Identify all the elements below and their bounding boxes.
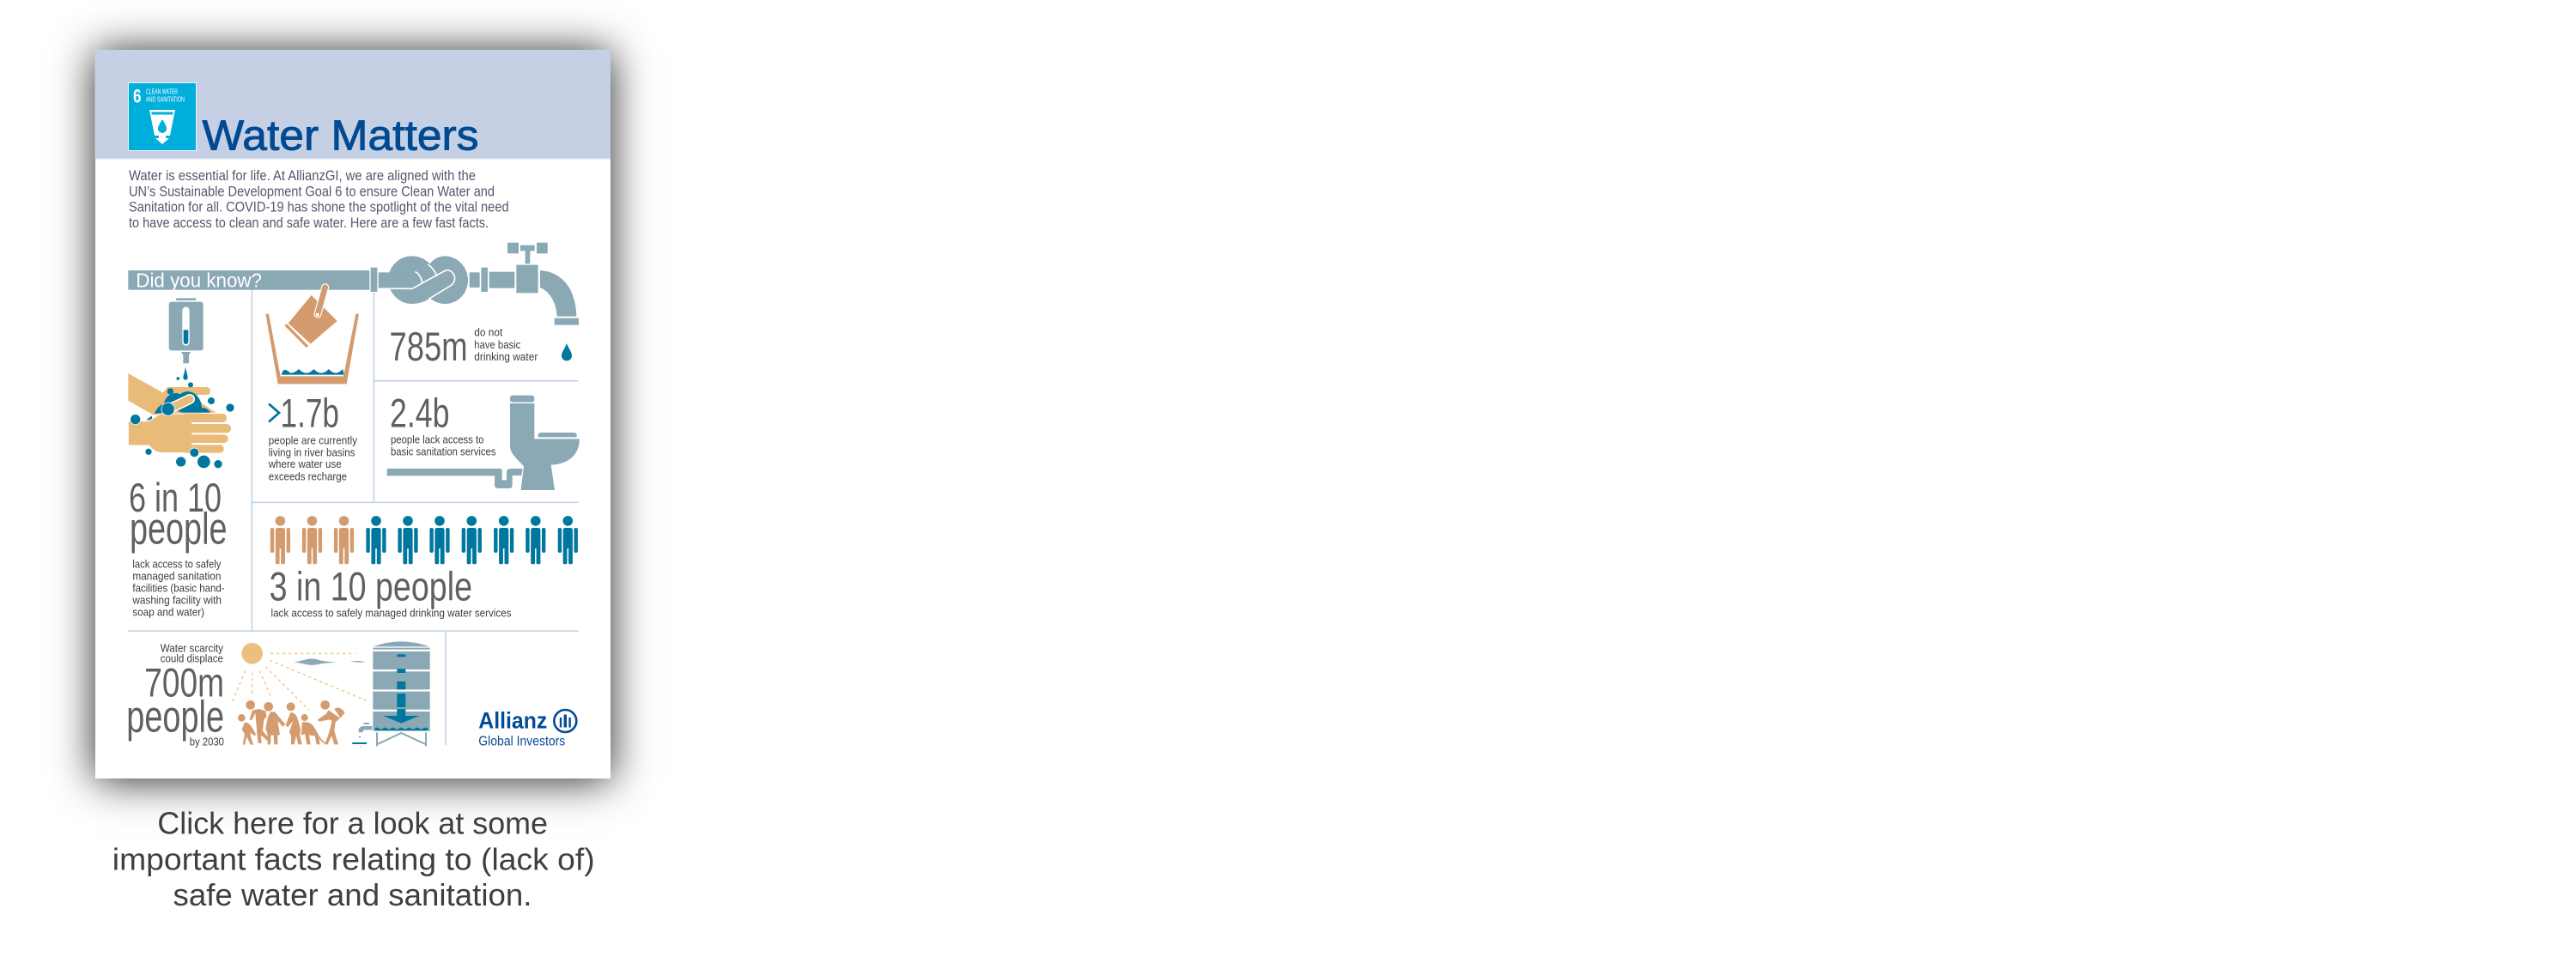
icon: bucket pouring into basin (265, 288, 359, 384)
stat: more than 1.7b: people are currently (269, 433, 358, 446)
icon: toilet and drain pipe (387, 396, 580, 490)
stat: 6 in 10 people: 6 in 10 (129, 475, 222, 520)
icon: water tank (373, 641, 430, 746)
stat: 3 in 10 people: lack access to safely managed drinking water services (271, 606, 512, 619)
icon: soap dispenser (169, 298, 204, 363)
caption: important facts relating to (lack of) (112, 841, 595, 876)
stat: 700m people: 700m (144, 660, 224, 706)
logo: Allianz Global Investors: Allianz (478, 707, 547, 733)
stat: 3 in 10 people: 3 in 10 people (270, 563, 472, 609)
intro paragraph: Water is essential for life. At AllianzGI, we are aligned with the (129, 168, 476, 184)
icon: washing hands (125, 366, 234, 468)
icon: SDG 6 badge: AND SANITATION (146, 96, 185, 104)
caption (112, 806, 595, 912)
stat: 700m people: people (126, 693, 224, 742)
stat: 2.4b (390, 390, 496, 458)
stat: 6 in 10 people: soap and water) (132, 606, 204, 619)
stat: 700m people: by 2030 (190, 736, 224, 748)
caption: safe water and sanitation. (173, 877, 532, 912)
intro paragraph: to have access to clean and safe water. Here are a few fast facts. (129, 215, 489, 231)
stat: more than 1.7b (268, 390, 358, 482)
icon: SDG 6 badge: 6 (133, 86, 141, 106)
intro paragraph (129, 168, 509, 231)
stat: 6 in 10 people (129, 475, 227, 619)
intro paragraph: Sanitation for all. COVID-19 has shone the spotlight of the vital need (129, 200, 509, 215)
icon: SDG 6 badge: CLEAN WATER (146, 88, 178, 95)
icon: displaced people (238, 700, 345, 745)
intro paragraph: UN’s Sustainable Development Goal 6 to ensure Clean Water and (129, 184, 495, 199)
stat: 785m: drinking water (474, 350, 538, 363)
stat: 785m: do not (474, 326, 503, 339)
stat: 2.4b: 2.4b (390, 390, 450, 435)
infographic card background with shadow (94, 50, 611, 778)
stat: 2.4b: basic sanitation services (391, 445, 496, 458)
stat: 700m people (126, 641, 224, 748)
icon: small tap with dripping water (352, 723, 372, 748)
icon: clouds (295, 658, 366, 665)
stat: more than 1.7b: where water use (268, 457, 342, 470)
stat: more than 1.7b: exceeds recharge (269, 469, 347, 482)
stat: 700m people: could displace (161, 651, 223, 664)
did you know pipe banner: Did you know? (136, 269, 262, 291)
pictogram: 3 of 10 people (270, 516, 578, 564)
logo: Allianz Global Investors: Global Investors (478, 734, 566, 748)
stat: more than 1.7b: living in river basins (269, 445, 355, 458)
did you know pipe banner (128, 269, 369, 291)
logo: Allianz Global Investors (478, 707, 576, 748)
stat: 700m people: Water scarcity (161, 641, 224, 654)
grid divider lines (128, 289, 579, 745)
icon: water drop (562, 343, 572, 360)
header band (94, 50, 611, 160)
stat: 6 in 10 people: facilities (basic hand- (132, 582, 225, 595)
stat: 785m (390, 324, 538, 369)
stat: 2.4b: people lack access to (391, 433, 484, 446)
stat: 785m: have basic (474, 338, 521, 351)
stat: 6 in 10 people: people (130, 504, 227, 554)
title: Water Matters (203, 112, 479, 159)
stat: 785m: 785m (390, 324, 467, 369)
stat: more than 1.7b: 1.7b (280, 390, 339, 435)
icon: knotted pipe and tap (371, 243, 579, 325)
icon: SDG 6 badge (129, 82, 196, 151)
stat: 6 in 10 people: lack access to safely (132, 558, 222, 571)
stat: 6 in 10 people: washing facility with (131, 594, 222, 607)
icon: sun with dotted rays (231, 643, 366, 710)
stat: 6 in 10 people: managed sanitation (132, 570, 221, 583)
caption: Click here for a look at some (157, 806, 548, 841)
